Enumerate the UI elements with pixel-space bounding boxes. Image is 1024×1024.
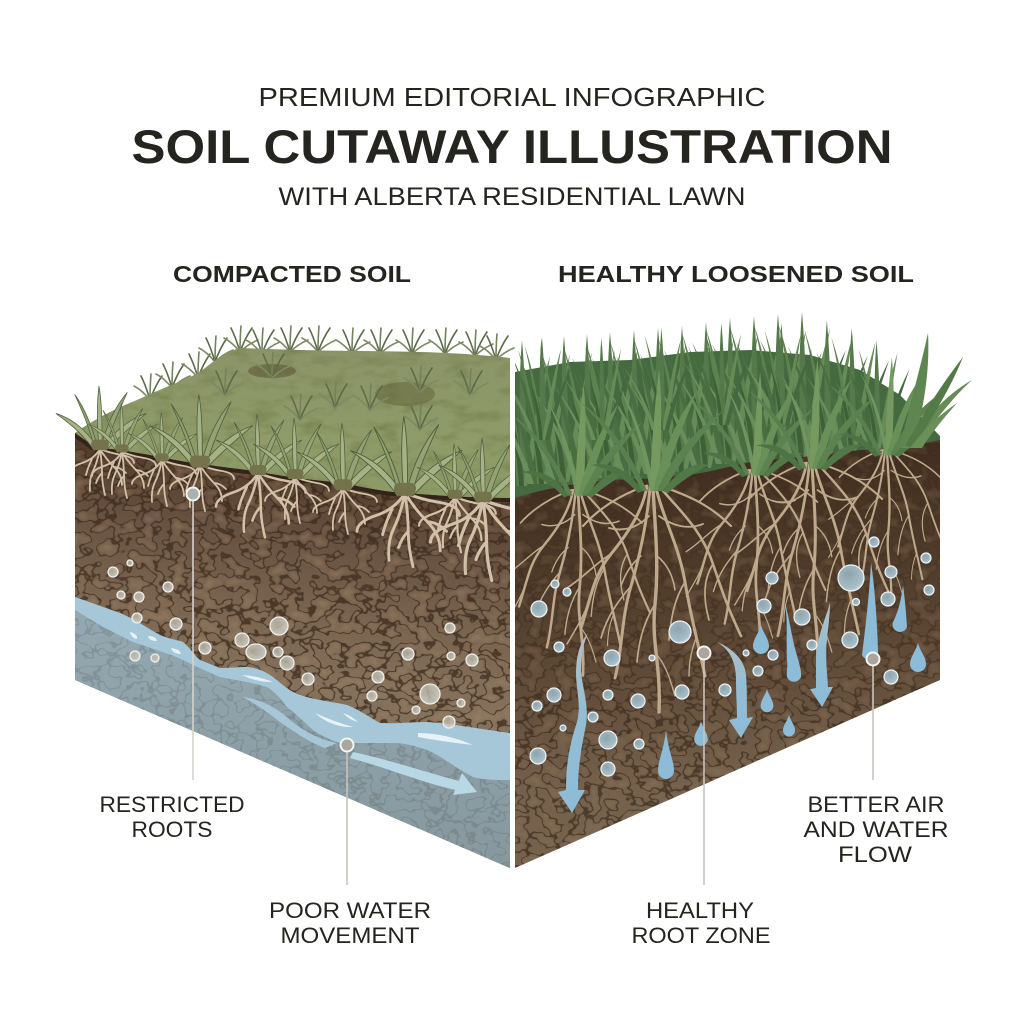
callout: restricted roots: RESTRICTED [100, 792, 244, 817]
soil cross-section [510, 435, 945, 870]
callout: better air and water flow: BETTER AIR [808, 792, 944, 817]
foreground grass tufts [512, 333, 972, 498]
restricted roots [70, 449, 542, 580]
water droplets [658, 562, 926, 779]
edge grass tufts [56, 386, 529, 502]
water stream [75, 597, 510, 780]
deep root systems [507, 450, 947, 712]
callout: healthy root zone: ROOT ZONE [632, 923, 770, 948]
callout: poor water movement: MOVEMENT [280, 923, 420, 948]
heading: compacted soil: COMPACTED SOIL [173, 261, 411, 287]
callout: better air and water flow: FLOW [838, 842, 912, 867]
title block: SOIL CUTAWAY ILLUSTRATION [132, 120, 892, 173]
panel: healthy loosened soil block [468, 312, 972, 870]
callout: better air and water flow: AND WATER [804, 817, 948, 842]
callout: poor water movement: POOR WATER [269, 898, 431, 923]
callout: restricted roots: ROOTS [132, 817, 212, 842]
air bubbles [108, 560, 478, 728]
water arrows [558, 603, 833, 813]
flow arrow [350, 752, 477, 795]
callout: better air and water flow [804, 652, 948, 867]
title block [132, 82, 892, 211]
callout: restricted roots [100, 488, 244, 842]
soil cross-section [70, 430, 515, 875]
callout: poor water movement [269, 738, 431, 948]
dense lawn [515, 312, 940, 498]
air bubbles [530, 537, 934, 776]
sparse lawn surface [70, 326, 515, 505]
title block: PREMIUM EDITORIAL INFOGRAPHIC [258, 82, 766, 112]
groundwater layer [75, 597, 510, 870]
panel: compacted soil block [56, 326, 543, 875]
title block: WITH ALBERTA RESIDENTIAL LAWN [278, 183, 746, 211]
callout: healthy root zone [632, 646, 770, 948]
infographic canvas [56, 88, 972, 943]
callout: healthy root zone: HEALTHY [646, 898, 754, 923]
heading: healthy loosened soil: HEALTHY LOOSENED SOIL [558, 261, 914, 287]
